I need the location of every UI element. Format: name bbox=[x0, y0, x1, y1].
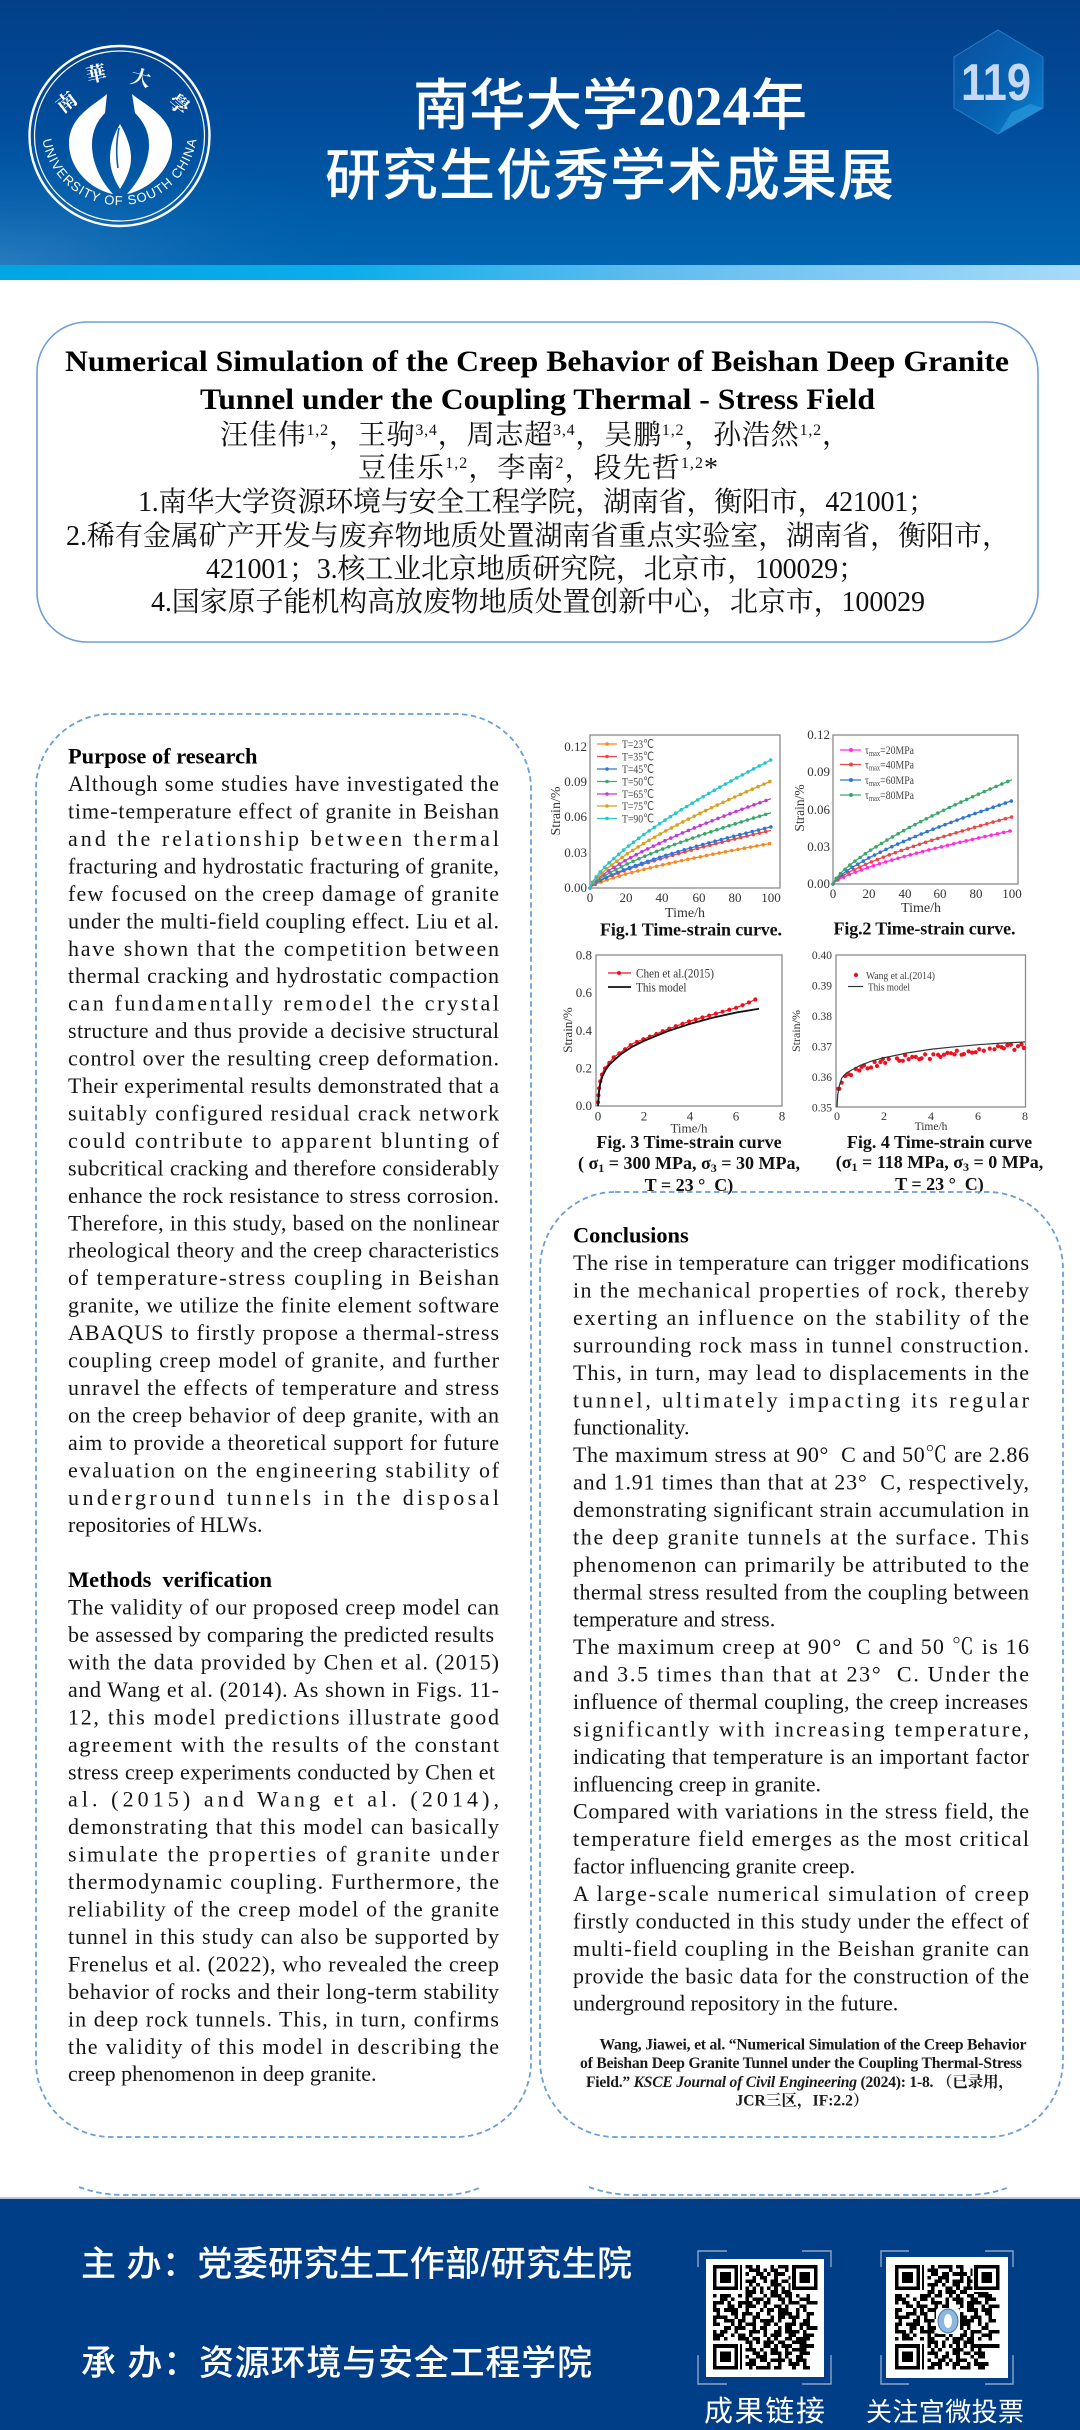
chart: Fig.2 time-strain curve: 0.06 bbox=[807, 802, 830, 817]
chart: Fig.4 time-strain curve: Fig. 4 Time-strain curve bbox=[847, 1132, 1032, 1152]
chart: Fig.4 time-strain curve: 1 bbox=[852, 1160, 858, 1174]
chart: Fig.2 time-strain curve: 0 bbox=[830, 886, 836, 901]
chart: Fig.1 time-strain curve: 0.12 bbox=[564, 739, 587, 754]
chart: Fig.4 time-strain curve: 0.37 bbox=[812, 1042, 832, 1054]
chart: Fig.1 time-strain curve: Time/h bbox=[665, 906, 705, 921]
chart: Fig.3 time-strain curve: T = 23 ° C) bbox=[645, 1175, 733, 1196]
chart: Fig.2 time-strain curve: 0.12 bbox=[807, 727, 830, 742]
text: conclusions body: temperature field emerges as the most critical bbox=[573, 1826, 1029, 1851]
chart: Fig.4 time-strain curve: This model bbox=[868, 982, 910, 994]
chart: Fig.2 time-strain curve: =80MPa bbox=[880, 788, 915, 802]
chart: Fig.3 time-strain curve: 2 bbox=[641, 1108, 647, 1124]
authors: ，李南 bbox=[468, 452, 554, 484]
chart: Fig.2 time-strain curve: 0.00 bbox=[807, 876, 830, 891]
text: methods body: agreement with the results of the constant bbox=[68, 1732, 499, 1757]
chart: Fig.1 time-strain curve: 0 bbox=[587, 890, 593, 905]
text: conclusions body: and 1.91 times than that at 23° C, respectively, bbox=[573, 1470, 1029, 1495]
text: purpose body: control over the resulting creep deformation. bbox=[68, 1046, 499, 1071]
text: organizers: 承 办：资源环境与安全工程学院 bbox=[81, 2344, 592, 2383]
authors: 1,2 bbox=[445, 455, 467, 472]
chart: Fig.4 time-strain curve: T = 23 ° C) bbox=[895, 1174, 984, 1195]
label: follow official account to vote: 关注宫微投票 bbox=[866, 2392, 1024, 2429]
footer banner bbox=[0, 2197, 1080, 2430]
text: methods body: stress creep experiments conducted by Chen et bbox=[68, 1759, 495, 1784]
authors: ，孙浩然 bbox=[684, 419, 800, 451]
chart: Fig.2 time-strain curve: 0.09 bbox=[807, 764, 830, 779]
badge: number 119 bbox=[954, 30, 1043, 134]
text: conclusions body: The rise in temperature can trigger modifications bbox=[573, 1250, 1029, 1275]
heading: exhibition title bbox=[325, 76, 894, 208]
authors: ，吴鹏 bbox=[575, 419, 661, 451]
chart: Fig.1 time-strain curve: 40 bbox=[656, 890, 668, 905]
chart: Fig.2 time-strain curve: 20 bbox=[862, 886, 876, 901]
text: conclusions body: underground repository in the future. bbox=[573, 1991, 898, 2016]
text: conclusions body: Compared with variations in the stress field, the bbox=[573, 1799, 1029, 1824]
chart: Fig.3 time-strain curve: = 300 MPa, σ bbox=[604, 1153, 711, 1173]
text: conclusions body: functionality. bbox=[573, 1415, 690, 1440]
icon: university logo: 南 bbox=[49, 83, 82, 119]
chart: Fig.2 time-strain curve: 40 bbox=[898, 886, 912, 901]
text: conclusions body: provide the basic data for the construction of the bbox=[573, 1963, 1029, 1988]
text: purpose body bbox=[68, 771, 500, 1537]
text: purpose body: aim to provide a theoretical support for future bbox=[68, 1430, 499, 1455]
chart: Fig.3 time-strain curve: Strain/% bbox=[560, 1007, 575, 1053]
text: conclusions body: firstly conducted in this study under the effect of bbox=[573, 1908, 1030, 1934]
text: conclusions body: demonstrating significant strain accumulation in bbox=[573, 1497, 1029, 1522]
chart: Fig.1 time-strain curve: T=90℃ bbox=[622, 812, 654, 826]
text: purpose body: and the relationship between thermal bbox=[68, 826, 499, 851]
text: purpose body: have shown that the competition between bbox=[68, 936, 499, 961]
text: methods body: al. (2015) and Wang et al. (2014), bbox=[68, 1787, 499, 1812]
text: purpose body: of temperature-stress coupling in Beishan bbox=[68, 1265, 499, 1290]
chart: Fig.4 time-strain curve: 2 bbox=[881, 1109, 887, 1123]
chart: Fig.2 time-strain curve: 80 bbox=[970, 886, 982, 901]
text: publication reference bbox=[580, 2036, 1027, 2110]
panel: conclusions bbox=[540, 1192, 1063, 2137]
chart: Fig.1 time-strain curve: 0.00 bbox=[564, 880, 587, 895]
chart: Fig.2 time-strain curve: τ bbox=[865, 788, 870, 802]
chart: Fig.1 time-strain curve: Fig.1 Time-strain curve. bbox=[600, 920, 782, 940]
text: publication reference: Wang, Jiawei, et al. “Numerical Simulation of the Creep Behavior bbox=[600, 2036, 1027, 2054]
authors bbox=[220, 419, 850, 484]
heading: methods verification: Methods verification bbox=[68, 1567, 273, 1592]
chart: Fig.3 time-strain curve: 3 bbox=[711, 1161, 717, 1175]
authors: 3,4 bbox=[415, 422, 437, 439]
text: methods body: behavior of rocks and their long-term stability bbox=[68, 1979, 499, 2004]
text: purpose body: could contribute to apparent blunting of bbox=[68, 1128, 500, 1153]
chart: Fig.3 time-strain curve: 0.4 bbox=[576, 1023, 592, 1038]
paper title: Numerical Simulation of the Creep Behavior of Beishan Deep Granite bbox=[65, 345, 1009, 378]
chart: Fig.3 time-strain curve: 0 bbox=[595, 1108, 601, 1124]
text: conclusions body: influencing creep in granite. bbox=[573, 1771, 821, 1796]
chart: Fig.3 time-strain curve: 1 bbox=[598, 1161, 604, 1175]
chart: Fig.3 time-strain curve: 0.8 bbox=[576, 948, 592, 962]
chart: Fig.3 time-strain curve: This model bbox=[636, 980, 687, 994]
heading: conclusions: Conclusions bbox=[573, 1223, 689, 1248]
chart: Fig.3 time-strain curve: 4 bbox=[687, 1108, 694, 1124]
chart: Fig.2 time-strain curve: 100 bbox=[1002, 886, 1022, 901]
chart: Fig.3 time-strain curve: ( σ bbox=[578, 1153, 598, 1173]
text: purpose body: granite, we utilize the finite element software bbox=[68, 1293, 499, 1318]
text: methods body: The validity of our proposed creep model can bbox=[68, 1595, 499, 1620]
chart: Fig.3 time-strain curve: Chen et al.(2015) bbox=[636, 966, 714, 980]
text: conclusions body: in the mechanical properties of rock, thereby bbox=[573, 1278, 1029, 1303]
authors: 1,2 bbox=[681, 455, 703, 472]
chart: Fig.3 time-strain curve: Time/h bbox=[670, 1120, 708, 1136]
chart: Fig.2 time-strain curve: τ bbox=[865, 773, 870, 787]
text: conclusions body: phenomenon can primarily be attributed to the bbox=[573, 1552, 1029, 1577]
chart: Fig.4 time-strain curve: = 118 MPa, σ bbox=[858, 1152, 963, 1172]
chart: Fig.2 time-strain curve: max bbox=[869, 749, 880, 758]
chart: Fig.1 time-strain curve: T=75℃ bbox=[622, 799, 654, 813]
text: conclusions body: thermal stress resulted from the coupling between bbox=[573, 1579, 1029, 1604]
text: purpose body: thermal cracking and hydrostatic compaction bbox=[68, 963, 499, 988]
icon: university logo: UNIVERSITY OF SOUTH CHINA bbox=[43, 138, 196, 206]
text: purpose body: repositories of HLWs. bbox=[68, 1512, 262, 1537]
text: methods body: creep phenomenon in deep granite. bbox=[68, 2061, 376, 2086]
text: conclusions body: A large-scale numerical simulation of creep bbox=[573, 1881, 1029, 1906]
chart: Fig.2 time-strain curve: Strain/% bbox=[792, 784, 807, 832]
chart: Fig.2 time-strain curve: 60 bbox=[934, 886, 946, 901]
text: conclusions body: temperature and stress. bbox=[573, 1607, 775, 1632]
text: conclusions body bbox=[573, 1250, 1030, 2016]
chart: Fig.1 time-strain curve: Strain/% bbox=[549, 786, 564, 836]
authors: ，王驹 bbox=[329, 419, 415, 451]
chart: Fig.4 time-strain curve: 0.40 bbox=[812, 950, 832, 962]
chart: Fig.3 time-strain curve: 8 bbox=[779, 1108, 785, 1124]
authors: 1,2 bbox=[306, 422, 328, 439]
chart: Fig.4 time-strain curve: (σ bbox=[836, 1152, 852, 1172]
text: conclusions body: factor influencing granite creep. bbox=[573, 1854, 855, 1879]
chart: Fig.1 time-strain curve: 0.06 bbox=[564, 809, 588, 824]
text: conclusions body: indicating that temperature is an important factor bbox=[573, 1744, 1030, 1769]
authors: ，段先哲 bbox=[565, 452, 680, 484]
text: conclusions body: exerting an influence on the stability of the bbox=[573, 1305, 1029, 1330]
text: organizers: 主 办：党委研究生工作部/研究生院 bbox=[81, 2245, 632, 2284]
chart: Fig.4 time-strain curve: Wang et al.(2014) bbox=[866, 970, 935, 982]
text: organizers bbox=[81, 2245, 632, 2383]
chart: Fig.1 time-strain curve bbox=[549, 735, 782, 940]
icon: university logo bbox=[28, 44, 211, 228]
text: purpose body: under the multi-field coupling effect. Liu et al. bbox=[68, 908, 499, 933]
chart: Fig.1 time-strain curve: 20 bbox=[620, 890, 632, 905]
chart: Fig.4 time-strain curve: Time/h bbox=[915, 1121, 948, 1133]
authors: * bbox=[704, 453, 718, 484]
icon: QR code for achievement link bbox=[698, 2251, 831, 2430]
chart: Fig.2 time-strain curve: τ bbox=[865, 758, 870, 772]
text: conclusions body: the deep granite tunnels at the surface. This bbox=[573, 1524, 1029, 1549]
text: purpose body: ABAQUS to firstly propose a thermal-stress bbox=[68, 1320, 499, 1345]
authors: 豆佳乐 bbox=[358, 453, 444, 484]
chart: Fig.4 time-strain curve: = 0 MPa, bbox=[969, 1152, 1043, 1172]
heading: exhibition title: 南华大学2024年 bbox=[413, 76, 807, 138]
heading: purpose of research: Purpose of research bbox=[68, 744, 258, 769]
text: methods body: tunnel in this study can also be supported by bbox=[68, 1924, 499, 1949]
text: purpose body: unravel the effects of temperature and stress bbox=[68, 1375, 499, 1400]
text: conclusions body: surrounding rock mass in tunnel construction. bbox=[573, 1332, 1029, 1357]
chart: Fig.1 time-strain curve: T=23℃ bbox=[622, 737, 654, 751]
text: methods body: reliability of the creep model of the granite bbox=[68, 1896, 499, 1922]
text: purpose body: evaluation on the engineering stability of bbox=[68, 1457, 500, 1482]
text: methods body: 12, this model predictions illustrate good bbox=[68, 1704, 499, 1729]
chart: Fig.1 time-strain curve: T=35℃ bbox=[622, 750, 654, 764]
affiliations: 2.稀有金属矿产开发与废弃物地质处置湖南省重点实验室，湖南省，衡阳市， bbox=[66, 520, 1010, 552]
text: publication reference: JCR三区，IF:2.2） bbox=[736, 2092, 868, 2110]
text: purpose body: subcritical cracking and therefore considerably bbox=[68, 1155, 499, 1180]
chart: Fig.1 time-strain curve: 80 bbox=[728, 890, 742, 905]
text: purpose body: coupling creep model of granite, and further bbox=[68, 1348, 500, 1372]
chart: Fig.3 time-strain curve: 0.2 bbox=[576, 1060, 592, 1076]
text: methods body: the validity of this model in describing the bbox=[68, 2034, 499, 2059]
text: conclusions body: The maximum creep at 90° C and 50 ℃ is 16 bbox=[573, 1634, 1029, 1659]
text: conclusions body: significantly with increasing temperature, bbox=[573, 1716, 1029, 1741]
chart: Fig.2 time-strain curve: max bbox=[869, 794, 880, 803]
text: methods body: in deep rock tunnels. This, in turn, confirms bbox=[68, 2006, 499, 2031]
text: methods body: simulate the properties of granite under bbox=[68, 1842, 500, 1867]
text: methods body: and Wang et al. (2014). As shown in Figs. 11- bbox=[68, 1677, 499, 1702]
text: conclusions body: influence of thermal coupling, the creep increases bbox=[573, 1689, 1028, 1714]
chart: Fig.1 time-strain curve: T=45℃ bbox=[622, 762, 654, 776]
authors: 2 bbox=[556, 455, 564, 472]
chart: Fig.4 time-strain curve: Strain/% bbox=[789, 1010, 803, 1052]
chart: Fig.1 time-strain curve: 100 bbox=[761, 890, 781, 905]
text: methods body: be assessed by comparing the predicted results bbox=[68, 1622, 494, 1647]
text: purpose body: can fundamentally remodel the crystal bbox=[68, 991, 499, 1016]
chart: Fig.1 time-strain curve: 0.09 bbox=[564, 774, 587, 789]
label: achievement link: 成果链接 bbox=[704, 2388, 825, 2430]
chart: Fig.2 time-strain curve: =40MPa bbox=[880, 758, 915, 772]
chart: Fig.1 time-strain curve: 60 bbox=[692, 890, 706, 905]
text: publication reference: Field.” KSCE Journal of Civil Engineering (2024): 1-8. （已录用， bbox=[586, 2073, 1014, 2092]
chart: Fig.3 time-strain curve: 0.6 bbox=[576, 985, 592, 1000]
chart: Fig.4 time-strain curve: 0 bbox=[834, 1109, 840, 1123]
icon: university logo: 大 bbox=[128, 60, 154, 93]
chart: Fig.4 time-strain curve: 8 bbox=[1022, 1109, 1028, 1123]
authors: ， bbox=[822, 420, 850, 451]
text: purpose body: rheological theory and the creep characteristics bbox=[68, 1238, 499, 1263]
chart: Fig.4 time-strain curve: 0.39 bbox=[812, 980, 832, 992]
chart: Fig.2 time-strain curve bbox=[792, 727, 1022, 938]
chart: Fig.4 time-strain curve: 0.35 bbox=[812, 1102, 832, 1114]
text: purpose body: few focused on the creep damage of granite bbox=[68, 881, 499, 906]
text: purpose body: fracturing and hydrostatic fracturing of granite, bbox=[68, 853, 499, 878]
authors: 汪佳伟 bbox=[220, 420, 306, 451]
authors: 3,4 bbox=[553, 422, 575, 439]
chart: Fig.2 time-strain curve: Fig.2 Time-strain curve. bbox=[834, 918, 1016, 938]
authors: 1,2 bbox=[662, 422, 683, 439]
chart: Fig.4 time-strain curve: 3 bbox=[963, 1160, 969, 1174]
text: purpose body: on the creep behavior of deep granite, with an bbox=[68, 1402, 499, 1427]
heading: exhibition title: 研究生优秀学术成果展 bbox=[325, 146, 894, 208]
text: purpose body: underground tunnels in the disposal bbox=[68, 1485, 499, 1510]
authors: 1,2 bbox=[800, 422, 821, 439]
chart: Fig.3 time-strain curve: Fig. 3 Time-strain curve bbox=[596, 1132, 782, 1152]
chart: Fig.3 time-strain curve bbox=[560, 948, 800, 1196]
chart: Fig.4 time-strain curve: 0.36 bbox=[812, 1072, 832, 1084]
text: conclusions body: This, in turn, may lead to displacements in the bbox=[573, 1360, 1029, 1385]
text: purpose body: Therefore, in this study, based on the nonlinear bbox=[68, 1210, 500, 1235]
text: conclusions body: tunnel, ultimately impacting its regular bbox=[573, 1387, 1030, 1412]
chart: Fig.3 time-strain curve: = 30 MPa, bbox=[717, 1153, 800, 1173]
authors: ，周志超 bbox=[438, 419, 552, 451]
chart: Fig.4 time-strain curve: 6 bbox=[975, 1109, 981, 1123]
header banner bbox=[0, 0, 1080, 280]
chart: Fig.4 time-strain curve: 4 bbox=[928, 1109, 934, 1123]
chart: Fig.1 time-strain curve: 0.03 bbox=[564, 845, 587, 860]
chart: Fig.4 time-strain curve bbox=[789, 950, 1043, 1195]
affiliations: 421001；3.核工业北京地质研究院，北京市，100029； bbox=[206, 553, 866, 585]
text: purpose body: Their experimental results demonstrated that a bbox=[68, 1073, 499, 1098]
text: conclusions body: and 3.5 times than that at 23° C. Under the bbox=[573, 1662, 1029, 1687]
chart: Fig.2 time-strain curve: =60MPa bbox=[880, 773, 915, 787]
text: publication reference: of Beishan Deep Granite Tunnel under the Coupling Thermal-Stress bbox=[580, 2055, 1022, 2072]
chart: Fig.2 time-strain curve: Time/h bbox=[901, 901, 941, 916]
chart: Fig.2 time-strain curve: max bbox=[869, 764, 880, 772]
chart: Fig.1 time-strain curve: T=50℃ bbox=[622, 774, 654, 788]
affiliations bbox=[66, 486, 1010, 618]
text: methods body: demonstrating that this model can basically bbox=[68, 1814, 499, 1839]
affiliations: 1.南华大学资源环境与安全工程学院，湖南省，衡阳市，421001； bbox=[138, 486, 936, 518]
icon: university logo: 華 bbox=[83, 56, 109, 89]
chart: Fig.1 time-strain curve: T=65℃ bbox=[622, 787, 654, 801]
text: methods body: Frenelus et al. (2022), who revealed the creep bbox=[68, 1951, 499, 1976]
chart: Fig.2 time-strain curve: 0.03 bbox=[807, 839, 830, 854]
text: purpose body: enhance the rock resistance to stress corrosion. bbox=[68, 1183, 499, 1208]
icon: QR code for official account voting bbox=[866, 2251, 1024, 2429]
chart: Fig.2 time-strain curve: max bbox=[869, 779, 880, 788]
text: methods body: thermodynamic coupling. Furthermore, the bbox=[68, 1869, 499, 1894]
text: purpose body: Although some studies have investigated the bbox=[68, 771, 499, 796]
panel: paper title and authors bbox=[37, 322, 1038, 642]
affiliations: 4.国家原子能机构高放废物地质处置创新中心，北京市，100029 bbox=[151, 586, 925, 618]
panel: purpose and methods bbox=[36, 714, 531, 2137]
chart: Fig.2 time-strain curve: τ bbox=[865, 743, 870, 757]
paper title: Tunnel under the Coupling Thermal - Stress Field bbox=[200, 383, 875, 416]
text: purpose body: structure and thus provide a decisive structural bbox=[68, 1018, 499, 1043]
chart: Fig.3 time-strain curve: 6 bbox=[733, 1108, 740, 1124]
chart: Fig.4 time-strain curve: 0.38 bbox=[812, 1011, 832, 1023]
chart: Fig.3 time-strain curve: 0.0 bbox=[576, 1098, 592, 1113]
text: purpose body: suitably configured residual crack network bbox=[68, 1100, 499, 1126]
text: methods body bbox=[68, 1595, 500, 2086]
chart: Fig.2 time-strain curve: =20MPa bbox=[880, 743, 915, 757]
text: conclusions body: multi-field coupling in the Beishan granite can bbox=[573, 1936, 1029, 1961]
text: purpose body: time-temperature effect of granite in Beishan bbox=[68, 798, 499, 824]
text: methods body: with the data provided by Chen et al. (2015) bbox=[68, 1650, 499, 1674]
text: conclusions body: The maximum stress at 90° C and 50℃ are 2.86 bbox=[573, 1442, 1029, 1467]
paper title bbox=[65, 345, 1009, 416]
badge: number 119: 119 bbox=[961, 54, 1031, 112]
icon: university logo: 學 bbox=[162, 85, 197, 121]
